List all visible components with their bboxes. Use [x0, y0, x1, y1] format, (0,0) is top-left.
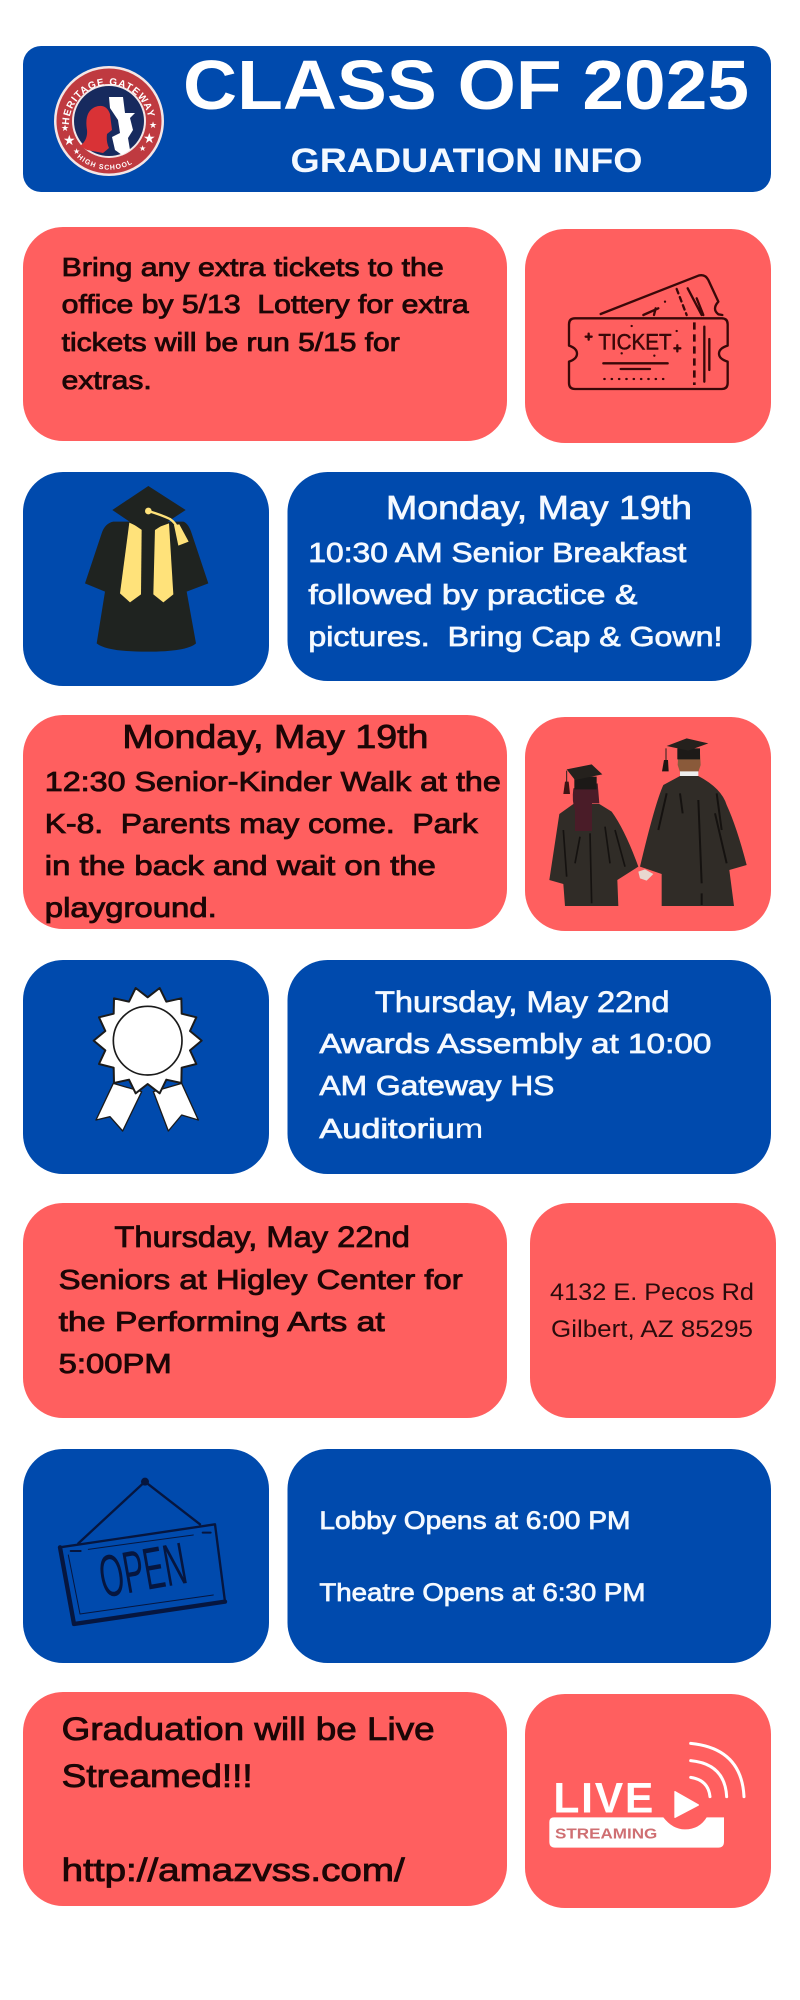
text: live stream note	[62, 1711, 435, 1888]
icon: school logo: HIGH SCHOOL	[77, 154, 132, 170]
text: theatre opens: Theatre Opens at 6:30 PM	[319, 1579, 645, 1607]
text: address	[550, 1279, 754, 1343]
icon: live streaming	[549, 1743, 744, 1848]
icon: open sign	[60, 1478, 225, 1624]
icon: two graduates holding hands	[549, 738, 747, 906]
panel: Monday senior breakfast	[288, 472, 752, 681]
text: walk details	[45, 766, 501, 923]
icon: graduation gown	[85, 486, 208, 652]
panel: ribbon icon card	[23, 960, 269, 1174]
panel: live stream	[23, 1692, 507, 1906]
icon: school logo: HERITAGE GATEWAY	[62, 78, 155, 124]
panel: graduates icon card	[525, 717, 771, 931]
icon: school logo	[54, 66, 164, 176]
panel: opening times	[288, 1449, 771, 1663]
panel: Monday senior-kinder walk	[23, 715, 507, 929]
text: breakfast details: followed by practice &	[308, 579, 637, 610]
panel: ticket icon card	[525, 229, 771, 443]
text: breakfast details: pictures. Bring Cap & Gown!	[308, 621, 722, 652]
icon label: TICKET	[598, 329, 672, 354]
text: Higley details: Seniors at Higley Center for	[59, 1264, 463, 1295]
panel: awards assembly	[288, 960, 771, 1174]
text: Higley details: the Performing Arts at	[59, 1306, 385, 1337]
text: Higley details: 5:00PM	[59, 1348, 172, 1379]
heading: Monday, May 19th	[122, 718, 428, 755]
icon: school logo: ★	[149, 120, 157, 130]
panel: live streaming icon card	[525, 1694, 771, 1908]
text: walk details: in the back and wait on the	[45, 850, 436, 881]
text: assembly details: Awards Assembly at 10:00	[319, 1028, 711, 1059]
text: ticket lottery note: tickets will be run 5/15 for	[62, 327, 400, 357]
icon: school logo: ★	[73, 147, 80, 156]
panel: seniors at Higley Center	[23, 1203, 507, 1418]
text: ticket lottery note: office by 5/13 Lottery for extra	[62, 289, 469, 319]
text: live stream note: http://amazvss.com/	[62, 1852, 405, 1888]
heading: Monday, May 19th	[386, 489, 692, 526]
icon: live streaming: STREAMING	[555, 1825, 657, 1842]
text: address: Gilbert, AZ 85295	[551, 1316, 753, 1343]
panel: extra tickets	[23, 227, 507, 441]
icon: school logo: ★	[143, 130, 156, 146]
text: ticket lottery note: extras.	[62, 365, 152, 395]
text: Higley details	[59, 1264, 463, 1379]
text: ticket lottery note	[62, 252, 469, 395]
icon: school logo: ★	[63, 132, 76, 148]
text: live stream note: Graduation will be Live	[62, 1711, 435, 1747]
text: walk details: 12:30 Senior-Kinder Walk at the	[45, 766, 501, 797]
heading: Thursday, May 22nd	[114, 1221, 410, 1254]
subtitle: GRADUATION INFO	[290, 142, 642, 180]
title: CLASS OF 2025	[183, 46, 749, 124]
icon: award ribbon	[94, 988, 202, 1131]
text: live stream note: Streamed!!!	[62, 1758, 253, 1794]
icon: tickets	[569, 275, 728, 389]
panel: address	[530, 1203, 776, 1418]
text: ticket lottery note: Bring any extra tickets to the	[62, 252, 444, 282]
panel: gown icon card	[23, 472, 269, 686]
icon: live streaming: LIVE	[553, 1775, 653, 1823]
text: breakfast details	[308, 537, 722, 652]
text: breakfast details: 10:30 AM Senior Breakfast	[308, 537, 687, 568]
text: assembly details: AM Gateway HS	[319, 1070, 554, 1101]
text: lobby opens: Lobby Opens at 6:00 PM	[319, 1507, 630, 1535]
text: assembly details	[319, 1028, 711, 1144]
text: walk details: playground.	[45, 892, 217, 923]
icon: school logo: ★	[139, 144, 146, 153]
icon label: OPEN	[94, 1529, 192, 1610]
text: assembly details: Auditoriu m	[319, 1113, 483, 1144]
panel: open sign icon card	[23, 1449, 269, 1663]
icon: school logo: ★	[61, 123, 69, 133]
header banner	[23, 46, 771, 192]
text: address: 4132 E. Pecos Rd	[550, 1279, 754, 1306]
heading: Thursday, May 22nd	[375, 986, 670, 1019]
text: walk details: K-8. Parents may come. Park	[45, 808, 478, 839]
